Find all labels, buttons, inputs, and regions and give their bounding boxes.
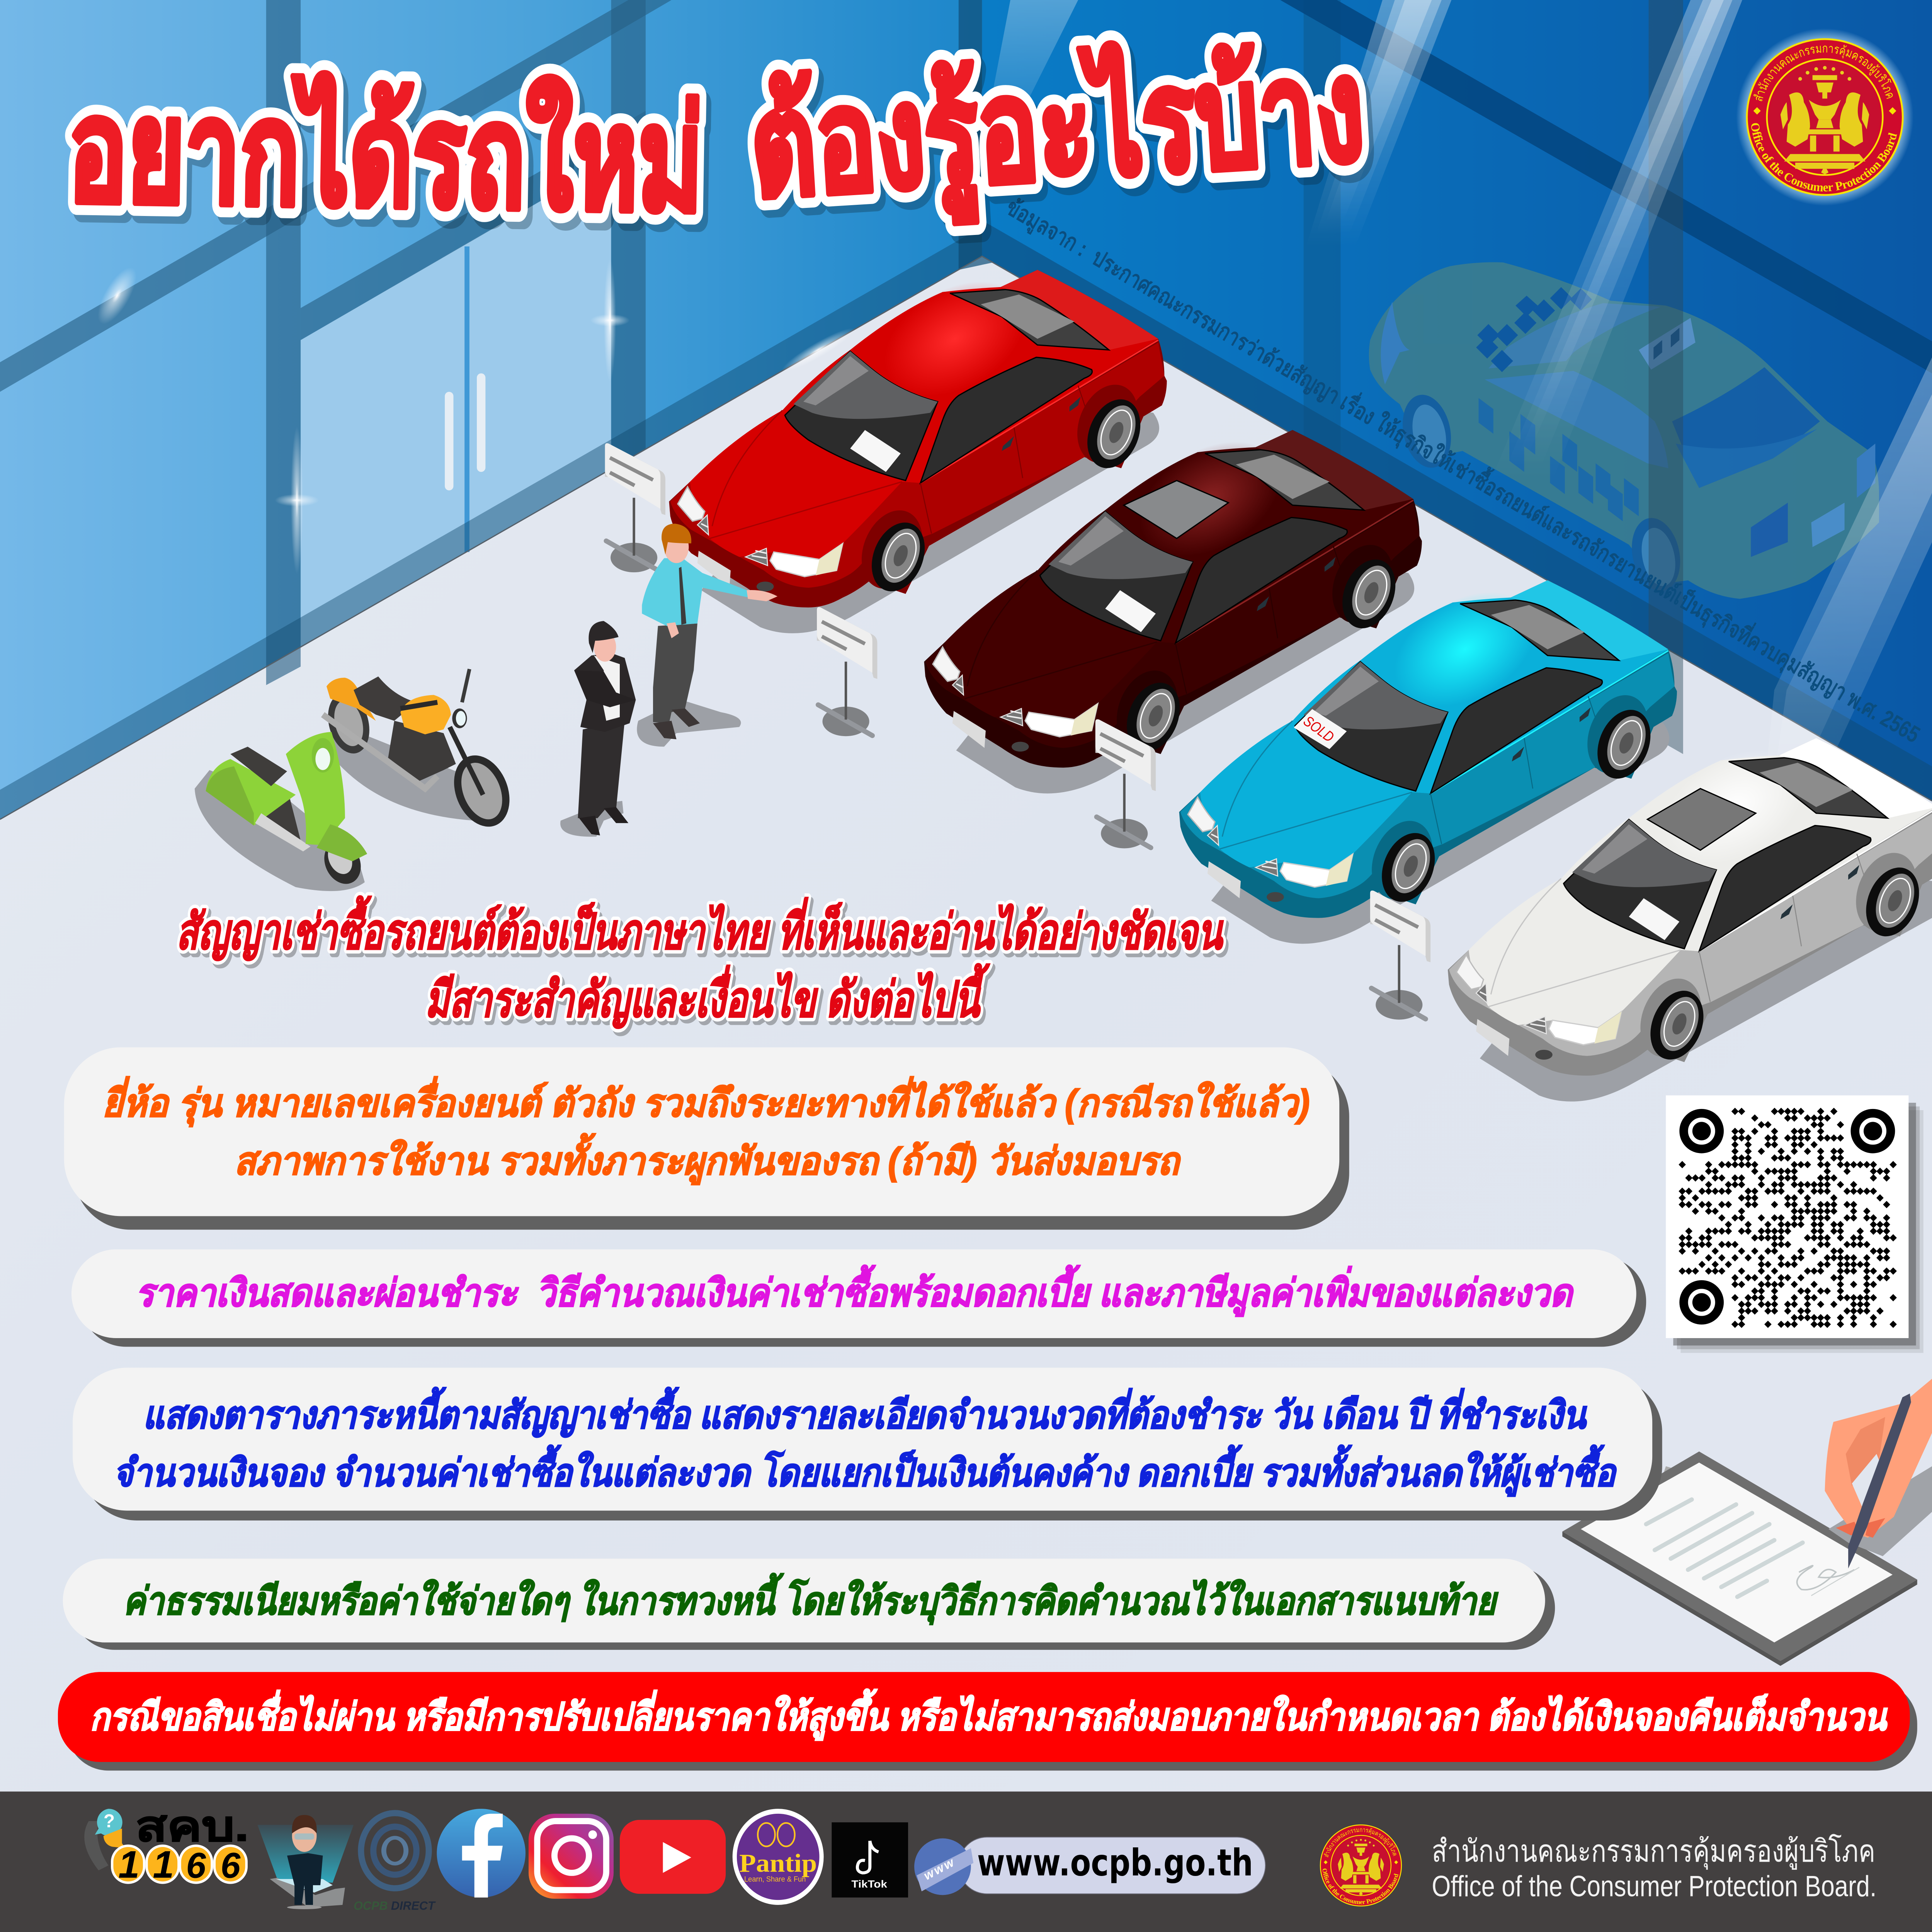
vertical beam over taxi xyxy=(1649,0,1683,754)
windshield sticker xyxy=(1629,898,1679,940)
footer seal: สำนักงานคณะกรรมการคุ้มครองผู้บริโภค xyxy=(1323,1826,1399,1858)
tiktok icon xyxy=(832,1822,908,1898)
hotline logo 1166: 1 xyxy=(118,1844,139,1886)
seal top right xyxy=(1736,28,1913,206)
panel 1: brand and condition: ยี่ห้อ รุ่น หมายเลขเครื่องยนต์ ตัวถัง รวมถึงระยะทางที่ได้ใช้แล้ว (กรณีรถใช้แล้ว) xyxy=(102,1076,1310,1127)
car: blue xyxy=(1179,568,1677,918)
mascot hologram xyxy=(257,1815,354,1909)
panel 4: fees: ค่าธรรมเนียมหรือค่าใช้จ่ายใดๆ ในการทวงหนี้ โดยให้ระบุวิธีการคิดคำนวณไว้ในเอกสารแนบท้าย xyxy=(123,1573,1498,1625)
floor highlight sparkles xyxy=(90,259,858,574)
pantip icon: Pantip xyxy=(739,1849,817,1878)
panel 4: fees xyxy=(63,1559,1555,1650)
sunroof xyxy=(1124,481,1228,538)
windshield sticker xyxy=(850,430,901,472)
car: dark red xyxy=(924,418,1422,768)
info stand 4 xyxy=(1370,891,1430,1020)
car: red xyxy=(669,258,1167,607)
panel 5: refund warning xyxy=(58,1672,1917,1770)
car: silver xyxy=(1448,726,1932,1076)
info stand 3 xyxy=(1095,719,1156,848)
subheading xyxy=(176,895,1226,1032)
seal top right: สำนักงานคณะกรรมการคุ้มครองผู้บริโภค xyxy=(1751,41,1898,103)
subheading: สัญญาเช่าซื้อรถยนต์ต้องเป็นภาษาไทย ที่เห็นและอ่านได้อย่างชัดเจน xyxy=(179,899,1226,965)
salesman xyxy=(637,524,777,747)
website pill with globe xyxy=(914,1837,1265,1895)
windshield sticker xyxy=(1105,590,1156,632)
title: อยากได้รถใหม่ xyxy=(72,75,709,247)
hotline logo 1166: 6 xyxy=(186,1845,206,1886)
floor edge line xyxy=(0,256,1932,820)
title: อยากได้รถใหม่ xyxy=(67,68,704,240)
ocpb direct logo: OCPB DIRECT xyxy=(354,1899,436,1913)
customer xyxy=(560,621,636,837)
right glass wall xyxy=(982,0,1932,801)
title: ต้องรู้อะไรบ้าง xyxy=(746,27,1369,236)
left glass wall xyxy=(0,0,993,820)
clipboard with hand xyxy=(1562,1379,1932,1666)
seal top right: Office of the Consumer Protection Board xyxy=(1748,122,1900,194)
title xyxy=(67,27,1374,247)
title: ต้องรู้อะไรบ้าง xyxy=(751,34,1374,243)
panel 3: debt schedule: แสดงตารางภาระหนี้ตามสัญญาเช่าซื้อ แสดงรายละเอียดจำนวนงวดที่ต้องชำระ วัน เดือน ปี ที่ชำระเงิน xyxy=(143,1387,1587,1438)
title: อยากได้รถใหม่ xyxy=(67,68,704,240)
panel 1: brand and condition: สภาพการใช้งาน รวมทั้งภาระผูกพันของรถ (ถ้ามี) วันส่งมอบรถ xyxy=(234,1133,1181,1185)
subheading: มีสาระสำคัญและเงื่อนไข ดังต่อไปนี้ xyxy=(425,963,990,1029)
hotline logo 1166: ? xyxy=(104,1811,115,1832)
sunroof xyxy=(1647,789,1756,850)
title: ต้องรู้อะไรบ้าง xyxy=(746,27,1369,236)
subheading: สัญญาเช่าซื้อรถยนต์ต้องเป็นภาษาไทย ที่เห็นและอ่านได้อย่างชัดเจน xyxy=(176,895,1224,961)
footer seal: Office of the Consumer Protection Board xyxy=(1321,1868,1400,1906)
hotline logo 1166: 6 xyxy=(221,1845,241,1886)
hotline logo 1166 xyxy=(84,1803,249,1886)
subheading: มีสาระสำคัญและเงื่อนไข ดังต่อไปนี้ xyxy=(425,963,990,1029)
info stand 1 xyxy=(605,443,665,572)
hotline logo 1166: สคบ. xyxy=(136,1803,249,1850)
pantip icon xyxy=(733,1809,824,1905)
ghost taxi on the wall xyxy=(1369,262,1879,599)
tiktok icon: TikTok xyxy=(851,1878,888,1890)
subheading: มีสาระสำคัญและเงื่อนไข ดังต่อไปนี้ xyxy=(428,967,992,1032)
footer seal xyxy=(1320,1825,1402,1906)
website pill with globe: www.ocpb.go.th xyxy=(977,1841,1253,1884)
pantip icon: Learn, Share & Fun xyxy=(744,1875,806,1883)
panel 1: brand and condition xyxy=(64,1047,1349,1230)
car shadows xyxy=(701,406,1932,1102)
panel 2: price and installments: ราคาเงินสดและผ่อนชำระ วิธีคำนวณเงินค่าเช่าซื้อพร้อมดอกเบี้ย และภาษีมูลค่าเพิ่มของแต่ละงวด xyxy=(136,1265,1574,1317)
subheading: สัญญาเช่าซื้อรถยนต์ต้องเป็นภาษาไทย ที่เห็นและอ่านได้อย่างชัดเจน xyxy=(176,895,1224,961)
footer bar xyxy=(0,1791,1932,1932)
youtube icon xyxy=(620,1820,726,1894)
panel 3: debt schedule xyxy=(73,1368,1662,1520)
info stand 2 xyxy=(817,607,877,736)
instagram icon xyxy=(529,1814,614,1899)
website pill with globe: www xyxy=(921,1855,957,1883)
hotline logo 1166: 1 xyxy=(153,1844,174,1886)
facebook icon xyxy=(437,1809,526,1898)
ocpb direct logo xyxy=(354,1810,436,1913)
motorcycle xyxy=(322,669,520,835)
scooter xyxy=(195,732,367,891)
panel 3: debt schedule: จำนวนเงินจอง จำนวนค่าเช่าซื้อในแต่ละงวด โดยแยกเป็นเงินต้นคงค้าง ดอกเบี้ย รวมทั้งส่วนลดให้ผู้เช่าซื้อ xyxy=(113,1445,1617,1497)
light rays xyxy=(980,0,1932,936)
panel 2: price and installments xyxy=(71,1249,1646,1347)
qr code xyxy=(1666,1095,1923,1353)
sold sticker: SOLD xyxy=(1300,713,1337,746)
